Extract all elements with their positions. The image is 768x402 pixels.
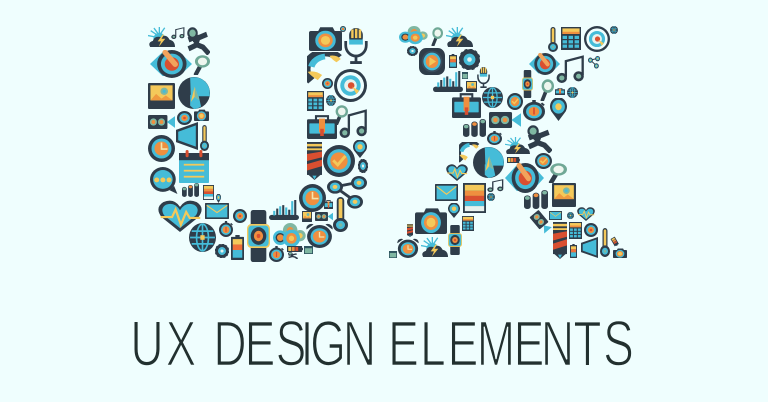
icon: camera [415,208,447,234]
icon: small battery [449,54,457,68]
icon: watch [247,210,270,262]
icon: check target [323,145,355,177]
icon: small video [315,212,333,221]
icon: small globe [567,87,578,98]
icon: calculator [307,91,324,111]
icon: video camera [148,115,175,129]
icon: compass [178,77,210,109]
icon: calculator [569,222,582,239]
icon: stopwatch [219,221,233,237]
icon: compass [473,147,504,178]
icon: small globe [567,212,574,219]
icon: arc gauge [459,142,479,161]
icon: calculator [462,216,474,231]
icon: arc gauge [306,53,341,81]
icon: envelope [435,184,458,201]
icon: target [584,223,598,237]
icon: network [327,176,367,209]
icon: gear [459,49,480,70]
icon: camera [309,27,342,51]
icon: small globe [487,193,495,201]
icon: small globe [326,95,336,106]
icon: weather [421,237,448,257]
icon: small square [462,72,468,79]
icon: target [233,209,247,223]
icon: eye target [150,50,192,78]
icon: pin [216,194,221,203]
icon: picture [552,183,576,207]
icon: clock target [299,184,326,212]
icon: alarm clock [306,224,333,248]
icon: magnifier [550,163,567,182]
icon: stopwatch [269,246,284,262]
icon: small round [340,26,346,32]
icon: magnifier [542,79,554,100]
icon: check target [535,153,552,169]
icon: eye target [529,53,560,75]
icon: briefcase [307,116,337,139]
icon: pencil [307,142,322,180]
icon: thermometer [333,197,348,232]
icon: bullseye [334,69,367,102]
icon: small tie [610,237,619,247]
icon: pencil [553,222,567,259]
icon: calendar [179,150,209,183]
icon: small gear [358,159,368,173]
icon: tilted video [529,210,553,234]
icon: magnifier [195,55,210,74]
icon: small envelope [549,211,562,220]
title: UX DESIGN ELEMENTS [130,308,634,379]
icon: pin [353,139,367,158]
icon: target cloud [399,26,428,44]
icon: bar chart [269,200,299,220]
icon: tall battery [231,235,244,260]
icon: music note [171,28,184,39]
icon: weather [148,27,175,47]
icon: video camera [489,112,521,128]
icon: bullseye [584,26,610,52]
icon: small target [322,78,333,89]
icon: eye target [505,163,544,193]
icon: check target [507,93,523,110]
icon: battery [287,246,303,252]
icon: weather [446,27,473,47]
icon: pills [463,119,486,137]
icon: pills [524,190,548,209]
icon: stopwatch [487,131,502,145]
icon: small network [588,56,600,68]
icon: runner [187,27,209,54]
icon: alarm clock [397,239,419,258]
icon: camera [194,110,209,121]
icon: heart [446,164,468,181]
icon: gear [215,244,229,258]
icon: pin [550,97,567,121]
icon: tablet [203,185,214,200]
icon: small picture [466,81,477,92]
icon: small square [389,251,397,258]
icon: thermometer [200,125,209,151]
icon: watch [522,70,533,98]
icon: small square [304,246,313,254]
icon: small battery [570,244,577,258]
icon: speaker [581,237,598,258]
icon letter U [148,26,368,262]
icon: small music note [487,180,503,192]
icon: play target [419,48,445,75]
icon: briefcase [452,94,481,118]
icon: heart [158,201,202,232]
icon: calculator [561,27,581,50]
icon: magnifier [432,27,443,45]
icon: magnifier [336,105,348,124]
icon: pills [182,183,199,197]
icon: thermometer [548,27,558,52]
icon: tablet [463,183,486,213]
icon: picture [148,83,175,109]
icon: thermometer [600,228,610,257]
icon: small pencil [407,224,413,237]
icon: speaker [176,122,198,150]
icon: speech bubble [150,167,177,194]
icon: small runner [288,252,298,259]
icon: small gear [407,46,418,56]
icon: small briefcase [324,200,333,209]
icon: gauge [148,135,175,162]
icon: music notes [557,57,584,83]
icon: small camera [613,248,627,258]
icon: small picture [302,211,312,222]
icon: heart [577,207,595,221]
icon: bar chart [433,71,463,92]
icon: music notes [340,111,367,138]
icon: small briefcase [555,88,565,95]
icon: target [177,111,192,125]
icon: pin [448,203,460,218]
icon: globe [482,87,503,108]
icon: microphone [346,28,366,63]
icon: target cloud [273,223,306,247]
icon: weather [505,137,530,154]
icon letter X [389,26,627,259]
icon: watch [448,225,462,255]
icon: globe [189,223,216,252]
icon: battery [507,157,520,163]
icon: stopwatch [523,100,545,121]
icon: runner [527,125,551,152]
icon: small round [610,26,618,34]
icon: envelope [205,203,229,219]
icon: microphone [478,67,489,87]
